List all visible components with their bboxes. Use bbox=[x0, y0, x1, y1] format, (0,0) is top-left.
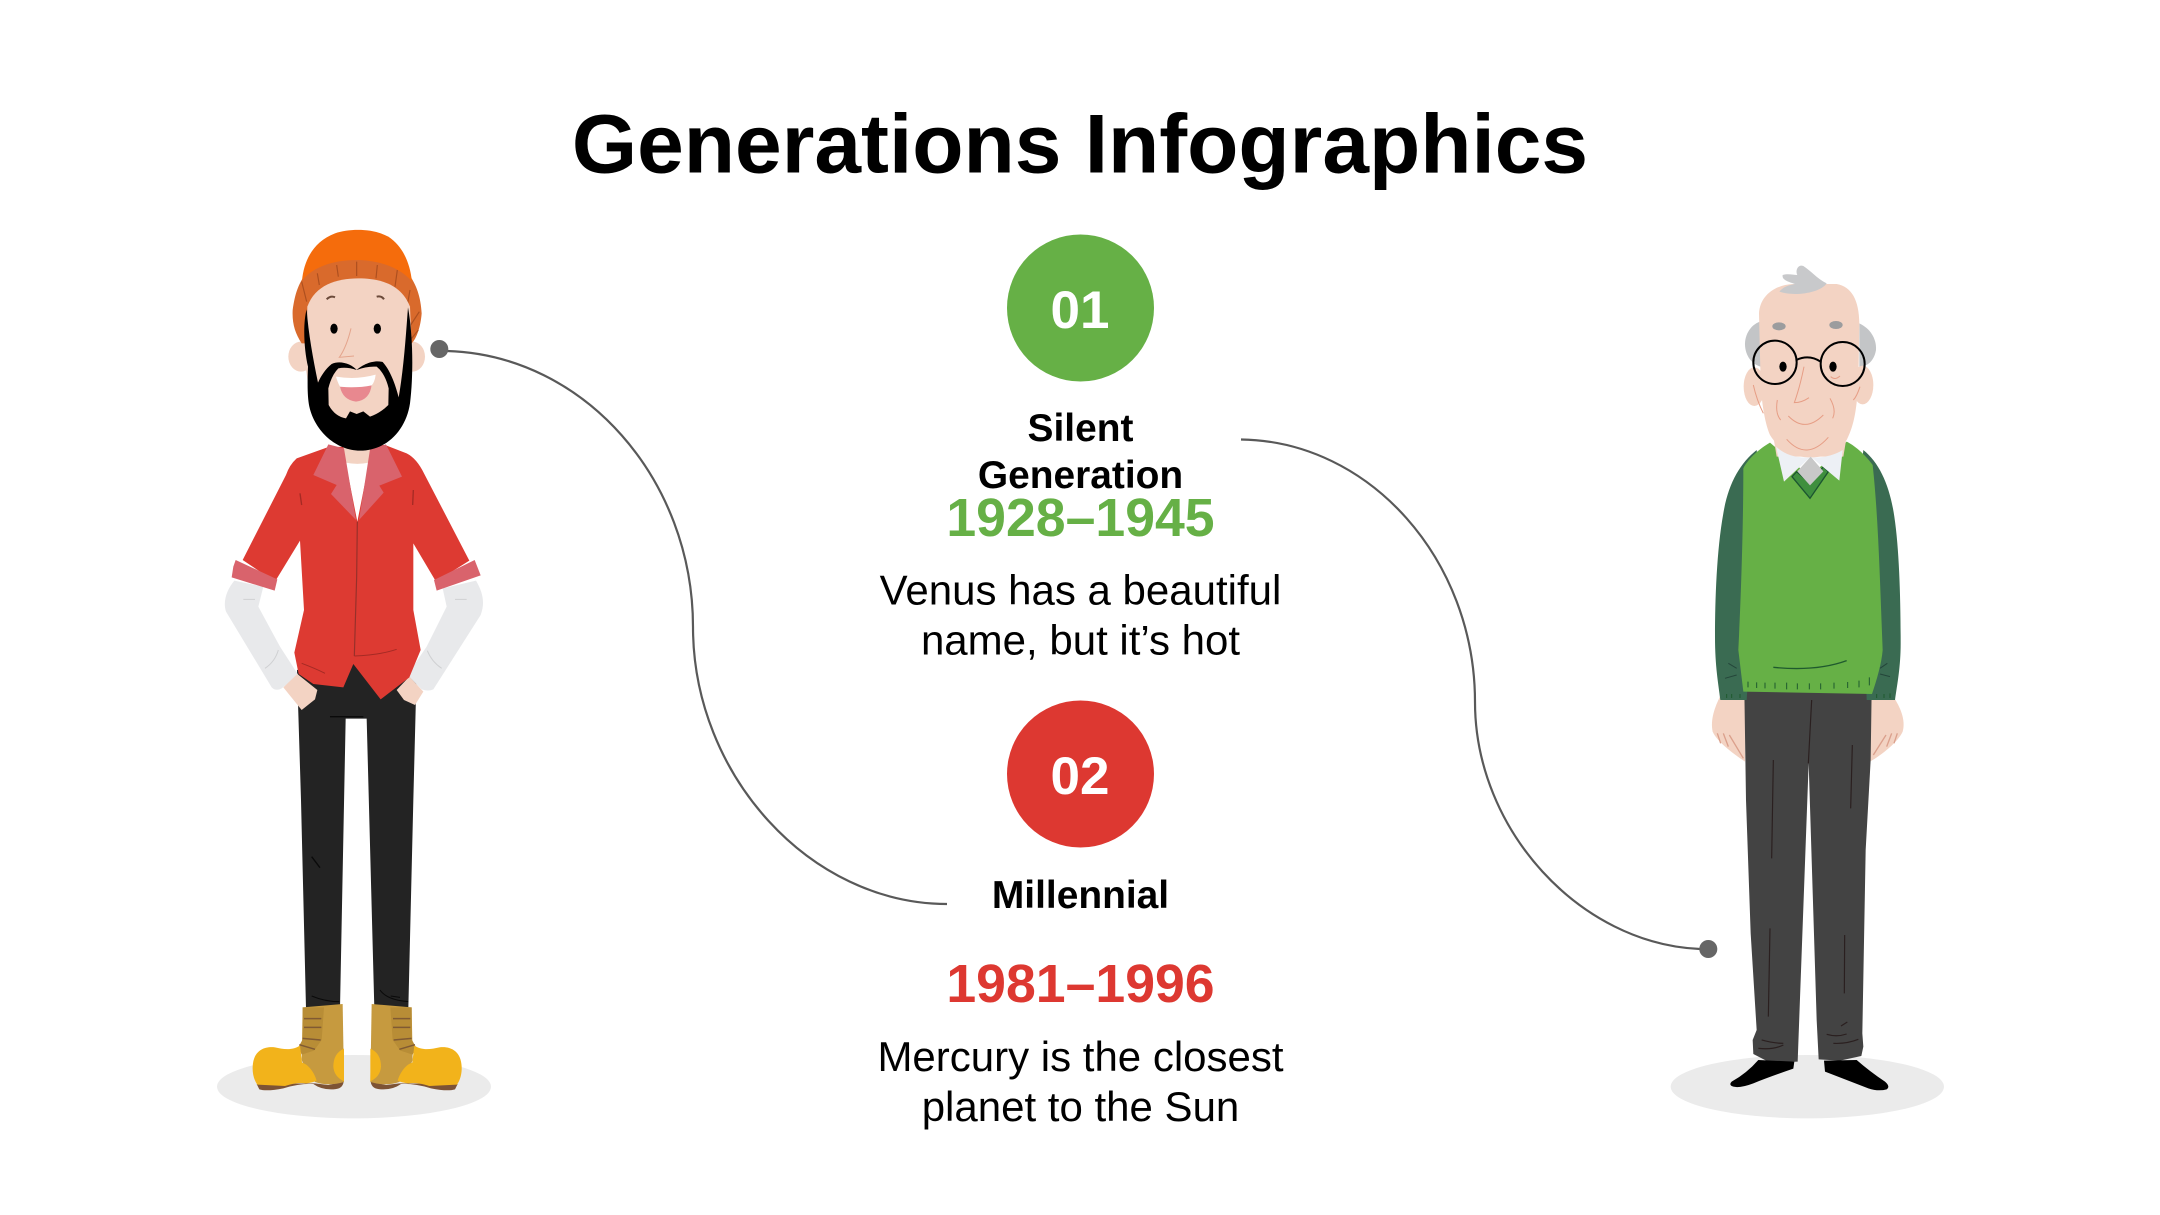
beard bbox=[304, 307, 412, 451]
eyes bbox=[330, 324, 338, 334]
text block: Mercury description bbox=[877, 1033, 1284, 1130]
text block: Mercury description: Mercury is the closest bbox=[877, 1033, 1284, 1080]
years: 1928–1945: 1928–1945 bbox=[946, 488, 1215, 548]
panel: Silent Generation bbox=[880, 234, 1281, 664]
text block: Venus description: name, but it’s hot bbox=[921, 616, 1240, 664]
beanie top bbox=[302, 230, 412, 282]
beanie band bbox=[293, 252, 422, 343]
upper body and head bbox=[1715, 266, 1901, 700]
neck and t-shirt bbox=[343, 443, 370, 467]
hair tuft bbox=[1779, 266, 1827, 294]
sleeves bbox=[1715, 450, 1760, 700]
title: Generations Infographics bbox=[572, 97, 1588, 191]
glasses bbox=[1753, 341, 1797, 384]
heading: Silent Generation bbox=[978, 407, 1183, 497]
text block: Venus description bbox=[880, 566, 1281, 664]
icon: number badge 02: 02 bbox=[1051, 747, 1109, 806]
eyes bbox=[1779, 362, 1787, 372]
collar bbox=[313, 444, 356, 520]
years: 1981–1996: 1981–1996 bbox=[946, 954, 1215, 1014]
illustration: bearded millennial man bbox=[217, 230, 491, 1118]
arrow: connector from Millennial to bearded man bbox=[430, 340, 947, 904]
face lines bbox=[1753, 367, 1860, 450]
shoes bbox=[1730, 1060, 1794, 1087]
icon: number badge 01: 01 bbox=[1051, 281, 1109, 340]
heading: Millennial: Millennial bbox=[992, 874, 1169, 917]
text block: Venus description: Venus has a beautiful bbox=[880, 566, 1281, 614]
heading: Silent Generation: Generation bbox=[978, 454, 1183, 497]
panel: Millennial bbox=[877, 700, 1284, 1130]
ears bbox=[288, 342, 314, 372]
illustration: old man in green vest bbox=[1671, 266, 1944, 1118]
heading: Silent Generation: Silent bbox=[1028, 407, 1133, 450]
neck, head bbox=[1773, 437, 1847, 457]
undershirt sleeves bbox=[225, 581, 298, 690]
ears and side hair bbox=[1745, 322, 1761, 367]
jacket bbox=[243, 445, 469, 699]
brows bbox=[1772, 322, 1786, 330]
vest bbox=[1738, 442, 1883, 694]
left boot bbox=[253, 1004, 344, 1090]
ground shadow, hands, trousers and shoes bbox=[1671, 690, 1944, 1118]
collar, tie and vest neckline bbox=[1792, 467, 1828, 498]
upper body and head bbox=[225, 230, 483, 710]
mouth bbox=[340, 385, 372, 402]
cuffs bbox=[232, 560, 277, 591]
face bbox=[306, 278, 413, 417]
hands bbox=[283, 674, 317, 710]
text block: Mercury description: planet to the Sun bbox=[922, 1083, 1239, 1130]
right boot bbox=[370, 1004, 462, 1090]
icon: number badge 02 bbox=[1007, 700, 1154, 848]
ground shadow and legs and boots bbox=[217, 657, 491, 1118]
arrow: connector from Silent Generation to old man bbox=[1241, 440, 1717, 958]
icon: number badge 01 bbox=[1007, 234, 1154, 382]
